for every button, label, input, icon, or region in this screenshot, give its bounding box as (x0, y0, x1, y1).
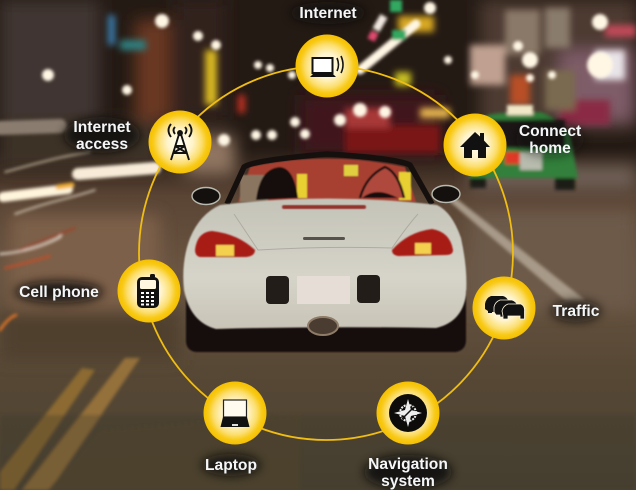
icon: compass (389, 394, 427, 432)
icon: three cars (485, 296, 525, 319)
light streaks (0, 126, 155, 330)
icon: house (460, 132, 490, 158)
icon: laptop (220, 400, 250, 427)
label: Cell phone: Cell phone (19, 284, 99, 301)
licence plate (297, 276, 350, 304)
rear deck line (234, 214, 418, 250)
icon: radio tower (168, 124, 192, 160)
car (183, 154, 466, 352)
vents (266, 276, 289, 304)
body (183, 198, 466, 329)
road markings (0, 195, 636, 490)
label: Traffic: Traffic (553, 303, 600, 320)
label: Internet (290, 2, 366, 24)
label: Navigation system: Navigation (368, 456, 448, 473)
node: Navigation system (376, 382, 440, 444)
label: Navigation system (364, 455, 452, 490)
right tail light (392, 229, 453, 256)
label: Internet: Internet (299, 5, 357, 22)
node: Traffic (472, 276, 536, 340)
wing mirrors (192, 188, 220, 204)
label: Internet access: Internet (73, 119, 131, 136)
windscreen interior (238, 158, 416, 202)
left tail light (195, 231, 255, 257)
label: Connect home: Connect (519, 123, 581, 140)
bright street lights (42, 0, 613, 146)
node: Internet access (148, 110, 212, 174)
icon: computer with signal (310, 56, 343, 77)
label: Internet access (64, 117, 140, 153)
label: Laptop: Laptop (205, 457, 257, 474)
label: Navigation system: system (381, 473, 435, 490)
node: Cell phone (118, 260, 180, 322)
connection ring (139, 66, 513, 440)
label: Connect home (516, 121, 584, 157)
node: Connect home (444, 114, 506, 176)
icon: mobile phone (137, 274, 159, 308)
green car in background (470, 105, 578, 190)
third brake light (282, 205, 366, 209)
badge (303, 237, 345, 240)
exhaust (308, 317, 338, 335)
label: Internet access: access (76, 136, 128, 153)
label: Laptop (202, 454, 260, 476)
roll bar (227, 154, 432, 204)
tyres and shadow (186, 290, 466, 352)
node: Laptop (204, 382, 266, 444)
label: Connect home: home (529, 140, 571, 157)
node: Internet (296, 34, 358, 98)
